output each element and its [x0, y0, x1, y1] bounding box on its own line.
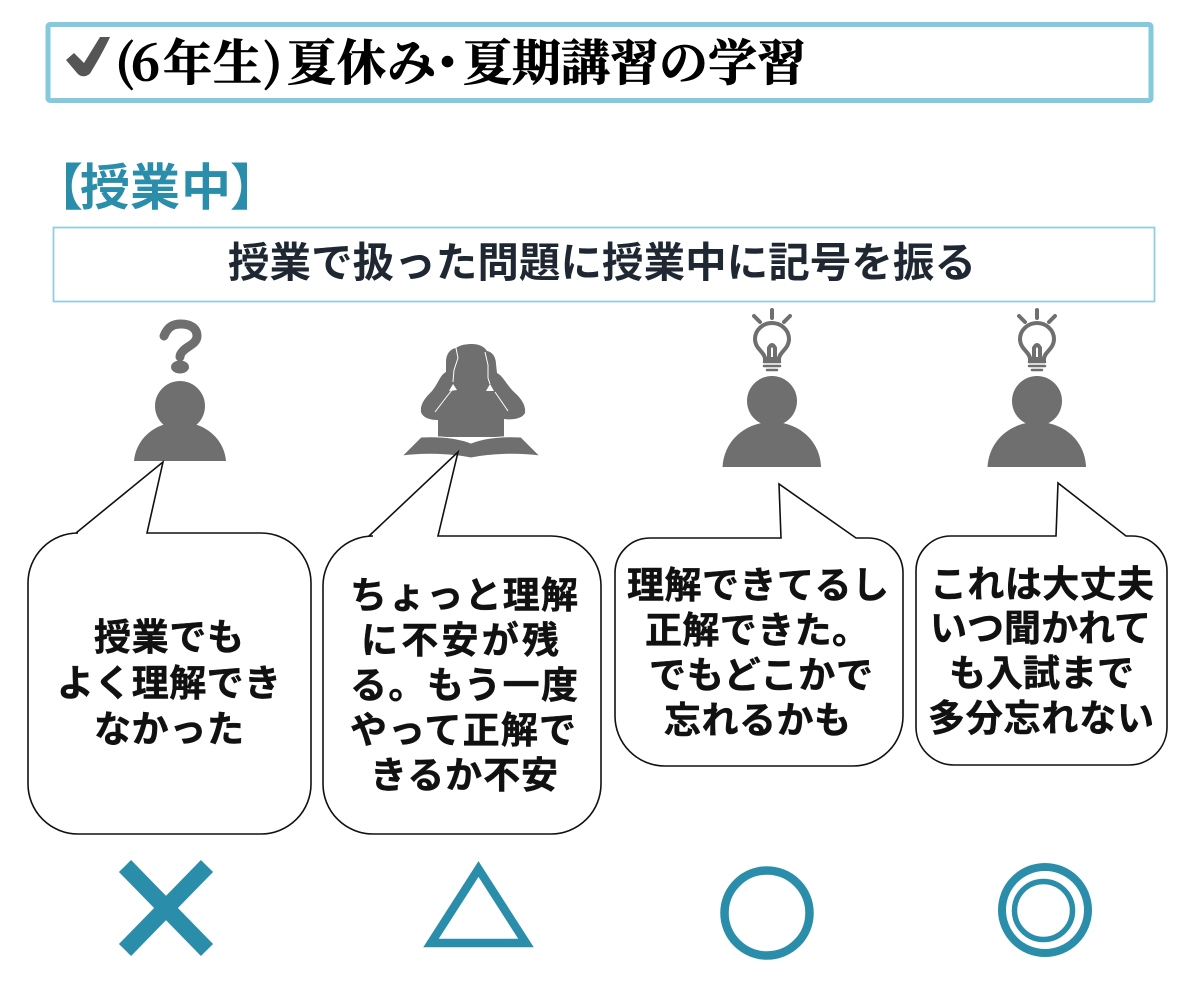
speech bubble: will not forget: これは大丈夫: [930, 564, 1154, 605]
icon: confused person: [134, 324, 226, 461]
title box: [48, 24, 1151, 100]
instruction box: [54, 228, 1154, 302]
speech bubble: did not understand: 授業でも: [94, 617, 244, 658]
icon: check mark: [66, 37, 110, 76]
symbol: cross: [125, 866, 207, 950]
speech bubble: will not forget: 多分忘れない: [928, 698, 1154, 739]
icon: person holding head over book: [402, 344, 540, 458]
icon: person with light bulb: [722, 310, 821, 467]
symbol: double circle: [1002, 867, 1088, 953]
speech bubble: slightly unsure: に不安が残: [361, 620, 559, 661]
speech bubble: did not understand: なかった: [94, 709, 244, 750]
speech bubble: slightly unsure: ちょっと理解: [350, 575, 578, 616]
speech bubble: understood but may forget: [615, 484, 903, 766]
speech bubble: understood but may forget: 忘れるかも: [664, 700, 851, 741]
speech bubble: slightly unsure: る。もう一度: [350, 665, 578, 706]
speech bubble: understood but may forget: でもどこかで: [649, 655, 873, 696]
instruction box: 授業で扱った問題に授業中に記号を振る: [228, 239, 976, 286]
symbol: triangle: [431, 869, 526, 943]
icon: confident person with light bulb: [988, 310, 1086, 467]
speech bubble: slightly unsure: やって正解で: [350, 710, 576, 751]
symbol: circle: [724, 870, 810, 956]
speech bubble: understood but may forget: 理解できてるし: [627, 565, 889, 606]
section heading: 【授業中】: [33, 148, 280, 220]
speech bubble: slightly unsure: [323, 452, 601, 834]
speech bubble: will not forget: も入試まで: [949, 653, 1134, 694]
title text: (6年生)夏休み・夏期講習の学習: [115, 25, 806, 95]
speech bubble: will not forget: いつ聞かれて: [930, 608, 1151, 649]
speech bubble: will not forget: [916, 483, 1167, 765]
speech bubble: slightly unsure: きるか不安: [370, 755, 558, 796]
speech bubble: did not understand: よく理解でき: [57, 663, 281, 704]
speech bubble: understood but may forget: 正解できた。: [645, 610, 869, 651]
speech bubble: did not understand: [28, 462, 311, 834]
